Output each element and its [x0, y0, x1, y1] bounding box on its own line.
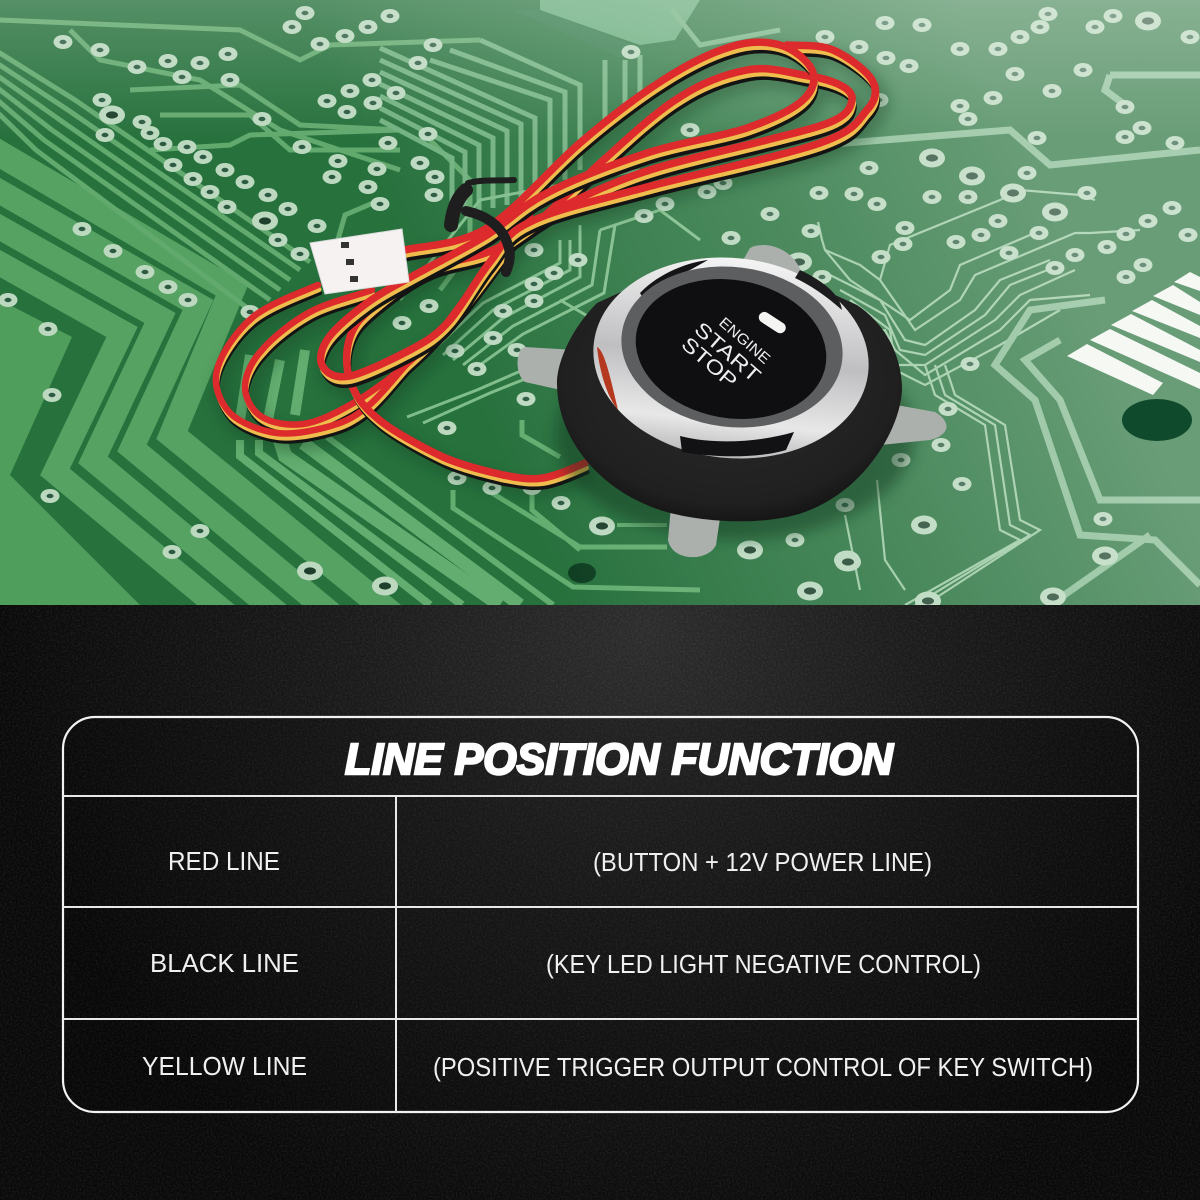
mounting hole — [1122, 399, 1192, 441]
table: line position function — [63, 717, 1138, 1112]
shadow — [555, 330, 915, 540]
metal tabs — [518, 245, 946, 557]
dark bottom reflection — [680, 432, 794, 456]
right wide traces — [820, 75, 1200, 605]
dark top-left reflection — [640, 260, 708, 302]
row: yellow line: (POSITIVE TRIGGER OUTPUT CONTROL OF KEY SWITCH) — [433, 1052, 1093, 1082]
white 3-pin connector — [310, 229, 409, 294]
thin parallel traces upper left — [0, 20, 480, 310]
row: black line: BLACK LINE — [150, 948, 299, 978]
row: yellow line — [142, 1051, 1093, 1082]
light wash over the far board — [0, 0, 1200, 605]
lower-centre traces — [240, 350, 700, 605]
top centre copper and comb traces — [380, 0, 780, 218]
button face — [624, 264, 838, 434]
right thin trace bundle — [818, 190, 1140, 605]
grey inner ring — [612, 254, 852, 440]
row: red line — [168, 846, 932, 877]
black rubber cable tie — [451, 180, 514, 272]
panel: black leather background — [0, 605, 1200, 1200]
chrome ring — [583, 244, 879, 472]
table title: LINE POSITION FUNCTION — [345, 735, 894, 784]
wire harness shadow — [222, 53, 881, 490]
button legend: ENGINE — [715, 314, 773, 368]
row: yellow line: YELLOW LINE — [142, 1051, 307, 1081]
edge connector fingers — [1067, 272, 1200, 395]
wide chevron traces — [0, 148, 405, 625]
rubber base — [557, 265, 902, 521]
row: black line: (KEY LED LIGHT NEGATIVE CONTROL) — [546, 949, 981, 979]
panel: circuit board photo — [0, 0, 1200, 625]
row: red line: (BUTTON + 12V POWER LINE) — [593, 847, 932, 877]
button legend: STOP — [677, 333, 741, 393]
engine start stop button — [518, 244, 946, 557]
dark top-right reflection — [795, 270, 842, 310]
via pads — [0, 6, 1200, 610]
via hole — [568, 563, 596, 583]
row: red line: RED LINE — [168, 846, 280, 876]
wire harness: red, yellow and black lines — [216, 42, 878, 488]
wire reflection in chrome — [597, 347, 618, 410]
lower left copper region — [0, 300, 140, 605]
centre thin traces — [400, 170, 700, 423]
LED pill — [757, 310, 788, 335]
button legend: START — [690, 318, 765, 387]
row: black line — [150, 948, 981, 979]
button legend — [677, 314, 773, 393]
